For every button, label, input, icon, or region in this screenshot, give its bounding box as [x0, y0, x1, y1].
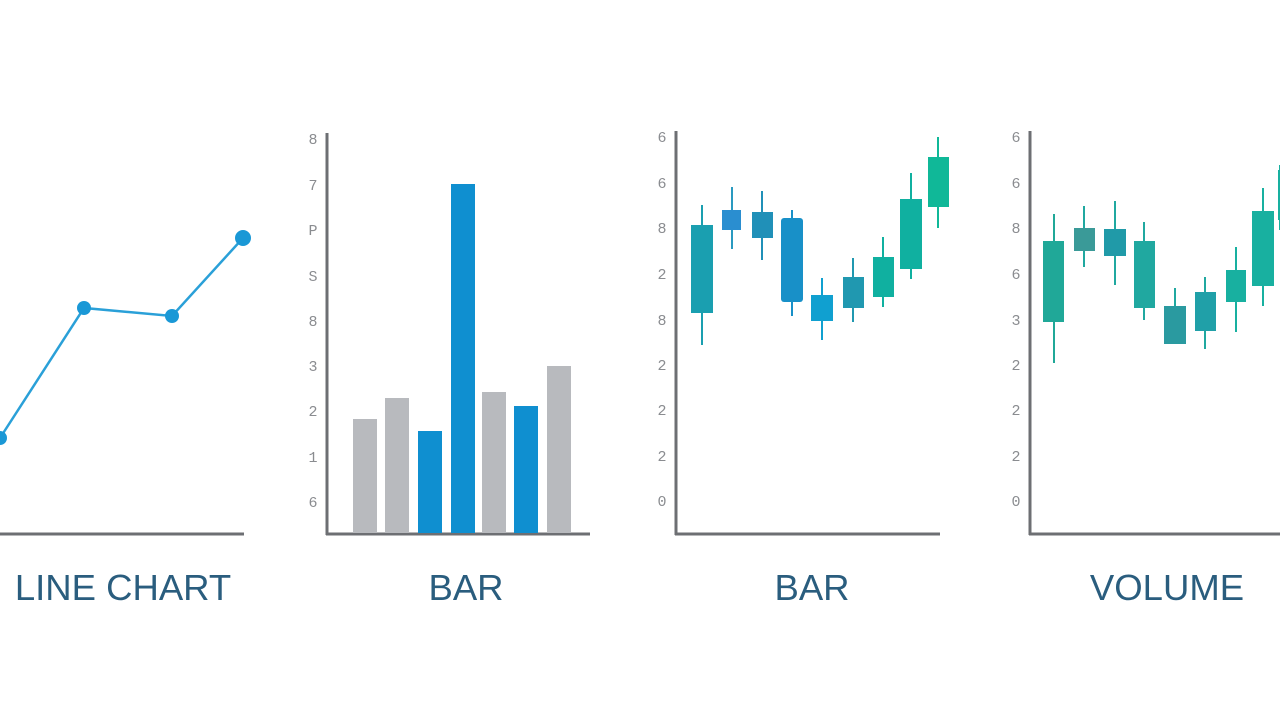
title: line chart: LINE CHART [15, 567, 231, 608]
title: volume: VOLUME [1090, 567, 1244, 608]
panel: candlestick bar [657, 130, 949, 608]
y-axis labels: 2 [657, 358, 667, 375]
line series [0, 230, 251, 445]
bars [353, 184, 571, 533]
y-axis labels: 2 [657, 267, 667, 284]
y-axis labels: 0 [1011, 494, 1021, 511]
y-axis labels: 1 [308, 450, 318, 467]
y-axis labels: 3 [1011, 313, 1021, 330]
y-axis labels: 2 [1011, 358, 1021, 375]
y-axis labels: 6 [1011, 267, 1021, 284]
y-axis labels: 8 [308, 314, 318, 331]
y-axis labels: 3 [308, 359, 318, 376]
y-axis labels: 2 [657, 449, 667, 466]
candles [691, 137, 949, 345]
y-axis labels: 7 [308, 178, 318, 195]
y-axis labels: 6 [1011, 130, 1021, 147]
y-axis labels [657, 130, 667, 511]
candles [1043, 165, 1280, 363]
y-axis labels: 2 [657, 403, 667, 420]
y-axis labels [1011, 130, 1021, 511]
title: bar: BAR [428, 567, 504, 608]
y-axis labels: 6 [1011, 176, 1021, 193]
y-axis labels: S [308, 269, 318, 286]
y-axis labels: 8 [657, 313, 667, 330]
y-axis labels: P [308, 223, 318, 240]
panel: line chart [0, 230, 251, 608]
y-axis labels: 6 [657, 176, 667, 193]
y-axis labels: 8 [1011, 221, 1021, 238]
y-axis labels: 8 [308, 132, 318, 149]
y-axis labels [308, 132, 318, 512]
panel: volume [1011, 130, 1280, 608]
y-axis labels: 2 [1011, 449, 1021, 466]
y-axis labels: 0 [657, 494, 667, 511]
panel: bar chart [308, 132, 590, 608]
y-axis labels: 2 [1011, 403, 1021, 420]
y-axis labels: 6 [308, 495, 318, 512]
y-axis labels: 6 [657, 130, 667, 147]
y-axis labels: 8 [657, 221, 667, 238]
title: bar (candles): BAR [774, 567, 850, 608]
y-axis labels: 2 [308, 404, 318, 421]
